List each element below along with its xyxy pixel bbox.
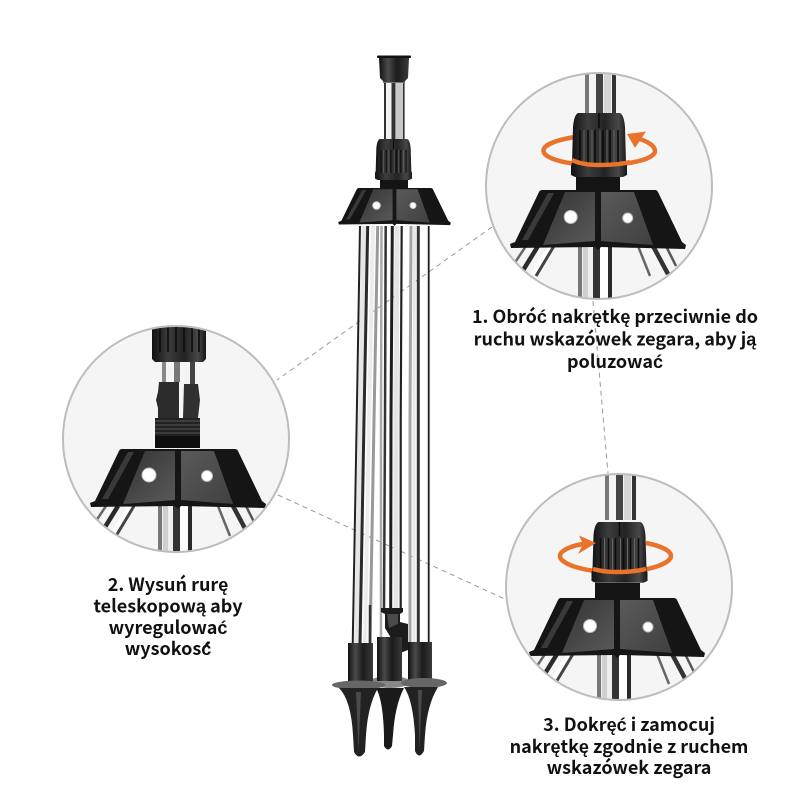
hub holes: [564, 210, 633, 224]
caption step 3: nakrętkę zgodnie z ruchem: [510, 733, 748, 759]
lower legs: [537, 655, 694, 699]
caption step 3: wskazówek zegara: [547, 754, 711, 780]
caption step 2: wyregulować: [109, 614, 227, 640]
conical hub: [338, 188, 451, 226]
arrow back: rear part of orange ellipse: [560, 543, 671, 572]
arrow: orange rotation, front: [578, 536, 646, 572]
split fingers: [156, 382, 200, 418]
hub: [510, 190, 686, 250]
caption step 1: poluzować: [567, 348, 663, 374]
telescopic tube: [585, 74, 616, 113]
rods: [162, 362, 195, 384]
top cup: [377, 56, 411, 82]
telescopic tube: [605, 472, 637, 520]
nut: [152, 327, 206, 362]
nut: [592, 522, 648, 583]
detail circle 1: loosen nut: [486, 69, 712, 306]
caption step 1: 1. Obróć nakrętkę przeciwnie do: [472, 303, 758, 329]
caption step 1: ruchu wskazówek zegara, aby ją: [474, 326, 757, 352]
dashed connector lines: [277, 227, 608, 600]
hub: [529, 598, 705, 658]
caption step 3: 3. Dokręć i zamocuj: [543, 711, 715, 737]
middle spike: [370, 637, 410, 750]
caption step 2: teleskopową aby: [93, 593, 243, 619]
lower legs: [96, 506, 254, 551]
upper telescopic tube: [383, 80, 405, 142]
hub holes: [373, 202, 416, 209]
detail circle 2: extend tube: [63, 320, 289, 566]
detail circle 3: tighten nut: [506, 472, 732, 714]
collar: [595, 583, 640, 598]
telescopic legs: [353, 226, 429, 645]
hub: [90, 449, 266, 509]
hub holes: [142, 468, 212, 482]
circle outline: [486, 73, 712, 299]
caption step 2: wysokość: [125, 635, 211, 661]
locking nut: [375, 139, 412, 180]
nut: [571, 113, 627, 177]
threaded collar: [155, 418, 200, 448]
left spike: [332, 643, 385, 756]
circle outline: [63, 326, 289, 552]
elbow joint: [381, 608, 408, 653]
tripod product photo: [332, 56, 451, 756]
circle outline: [506, 474, 732, 700]
collar: [380, 180, 408, 189]
collar: [576, 177, 620, 190]
arrow back: rear part of orange ellipse: [543, 137, 655, 165]
arrow: orange rotation, front: [572, 132, 646, 165]
hub holes: [584, 620, 653, 632]
caption step 2: 2. Wysuń rurę: [108, 571, 228, 597]
right spike: [401, 642, 447, 756]
lower legs: [515, 247, 678, 298]
